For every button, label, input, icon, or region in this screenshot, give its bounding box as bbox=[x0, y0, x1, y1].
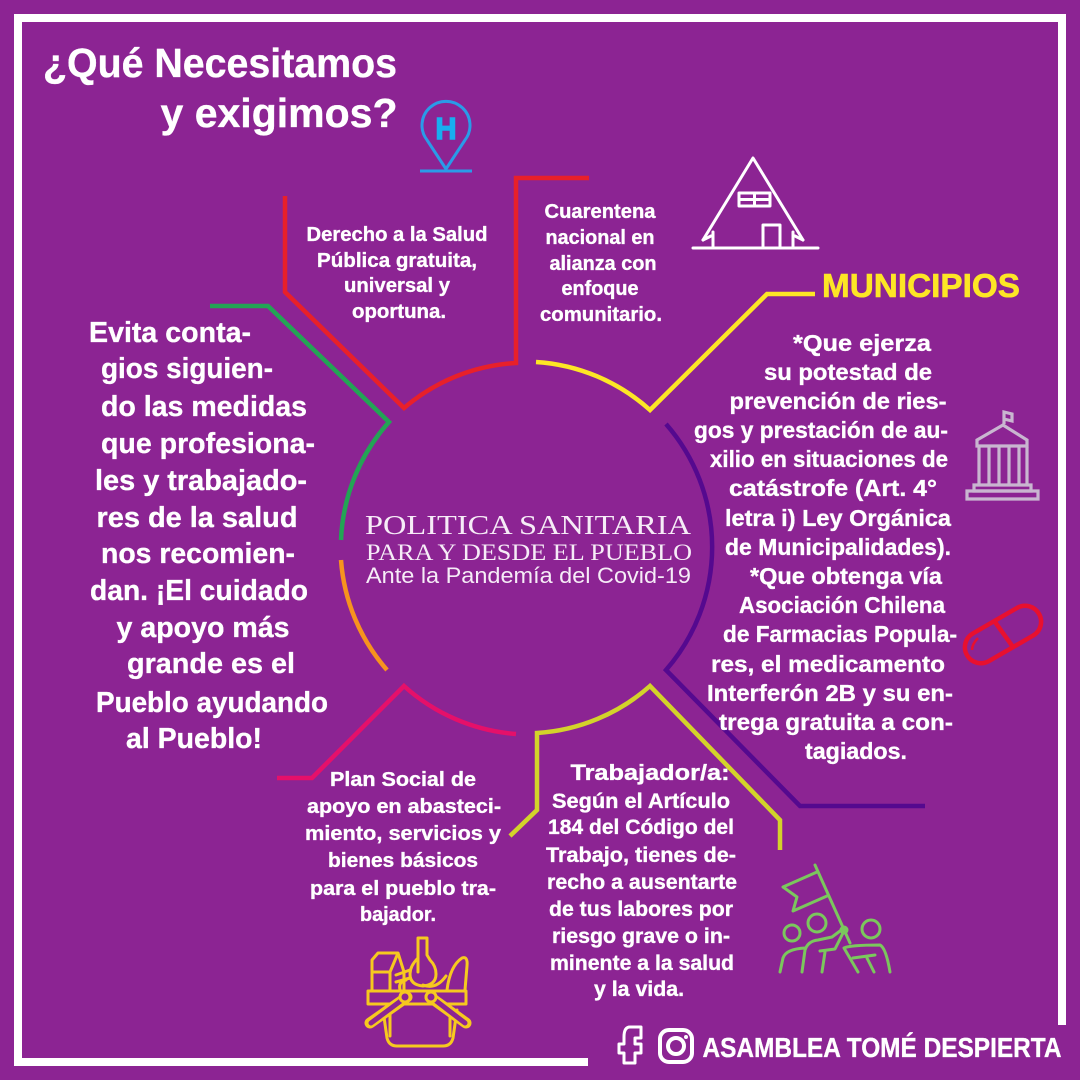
text: derecho a la salud bbox=[306, 224, 488, 323]
text: trabajador/a: y la vida. bbox=[594, 978, 684, 1001]
text: trabajador/a: riesgo grave o in- bbox=[552, 925, 730, 948]
title bbox=[43, 40, 398, 136]
text: municipios demands bbox=[694, 330, 957, 764]
text: evita contagios: que profesiona- bbox=[101, 428, 315, 460]
text: evita contagios: les y trabajado- bbox=[95, 465, 307, 497]
text: municipios demands: catástrofe (Art. 4° bbox=[729, 475, 937, 501]
box bbox=[372, 953, 404, 990]
text: municipios demands: xilio en situaciones de bbox=[710, 446, 948, 472]
belt bbox=[368, 991, 466, 1004]
text: cuarentena bbox=[540, 201, 662, 326]
text: trabajador/a: Trabajo, tienes de- bbox=[546, 844, 736, 867]
text: municipios demands: trega gratuita a con- bbox=[719, 709, 953, 735]
central title bbox=[365, 510, 692, 588]
text: plan social: para el pueblo tra- bbox=[310, 878, 496, 900]
text: municipios demands: letra i) Ley Orgánica bbox=[725, 505, 951, 531]
text: plan social: bajador. bbox=[360, 904, 436, 926]
text: evita contagios: dan. ¡El cuidado bbox=[90, 575, 308, 607]
fruit and bread bbox=[396, 970, 410, 990]
social footer bbox=[619, 1027, 1062, 1063]
green connector bbox=[210, 306, 389, 540]
text: cuarentena: comunitario. bbox=[540, 304, 662, 326]
text: derecho a la salud: Derecho a la Salud bbox=[306, 224, 488, 246]
text: evita contagios: res de la salud bbox=[96, 502, 298, 534]
bottle bbox=[410, 938, 436, 986]
text: trabajador/a: Según el Artículo bbox=[552, 790, 730, 813]
text: trabajador/a: recho a ausentarte bbox=[547, 871, 737, 894]
text: derecho a la salud: oportuna. bbox=[352, 301, 446, 323]
title: y exigimos? bbox=[160, 90, 398, 136]
text: plan social: Plan Social de bbox=[330, 769, 476, 791]
text: plan social: miento, servicios y bbox=[305, 823, 502, 845]
central title: POLITICA SANITARIA bbox=[365, 510, 692, 540]
text: plan social bbox=[305, 769, 502, 926]
text: municipios demands: *Que obtenga vía bbox=[750, 563, 942, 589]
yellow connector bbox=[536, 294, 815, 410]
text: trabajador/a bbox=[546, 760, 737, 1001]
text: evita contagios: al Pueblo! bbox=[126, 723, 262, 755]
heading: municipios: MUNICIPIOS bbox=[822, 267, 1020, 304]
icon: house bbox=[693, 158, 818, 248]
text: municipios demands: *Que ejerza bbox=[793, 330, 931, 356]
dark violet connector bbox=[666, 424, 925, 806]
text: plan social: bienes básicos bbox=[328, 850, 478, 872]
text: plan social: apoyo en abasteci- bbox=[307, 796, 501, 818]
text: evita contagios: Evita conta- bbox=[89, 317, 251, 349]
icon: hospital pin: H bbox=[436, 111, 456, 146]
text: municipios demands: Asociación Chilena bbox=[739, 592, 945, 618]
text: municipios demands: su potestad de bbox=[764, 359, 932, 385]
text: municipios demands: prevención de ries- bbox=[730, 388, 946, 414]
text: municipios demands: de Farmacias Popula- bbox=[723, 621, 957, 647]
magenta connector bbox=[277, 686, 516, 778]
text: municipios demands: Interferón 2B y su en- bbox=[707, 680, 953, 706]
red connector bbox=[285, 178, 589, 408]
text: evita contagios: grande es el bbox=[127, 648, 295, 680]
text: municipios demands: gos y prestación de au- bbox=[694, 417, 948, 443]
text: cuarentena: alianza con bbox=[550, 253, 656, 275]
icon: food basket bbox=[368, 938, 467, 1046]
orange arc bbox=[341, 560, 387, 670]
text: municipios demands: res, el medicamento bbox=[711, 651, 945, 677]
text: trabajador/a: minente a la salud bbox=[550, 952, 734, 975]
icon: facebook bbox=[619, 1027, 641, 1063]
text: cuarentena: nacional en bbox=[546, 227, 654, 249]
text: trabajador/a: 184 del Código del bbox=[548, 816, 734, 839]
icon: instagram bbox=[660, 1030, 692, 1062]
text: municipios demands: tagiados. bbox=[805, 738, 907, 764]
text: cuarentena: Cuarentena bbox=[544, 201, 656, 223]
icon: hospital pin bbox=[420, 101, 472, 171]
text: trabajador/a: de tus labores por bbox=[549, 898, 733, 921]
icon: people with flag bbox=[780, 865, 890, 972]
text: evita contagios: nos recomien- bbox=[101, 538, 295, 570]
diagram ring and connector lines bbox=[210, 178, 925, 850]
basket body bbox=[383, 1010, 457, 1046]
central title: Ante la Pandemía del Covid-19 bbox=[366, 563, 691, 588]
icon: municipal building bbox=[967, 412, 1038, 499]
text: cuarentena: enfoque bbox=[562, 278, 638, 300]
text: derecho a la salud: Pública gratuita, bbox=[317, 250, 477, 272]
text: derecho a la salud: universal y bbox=[344, 275, 451, 297]
handles bbox=[370, 997, 466, 1023]
text: evita contagios: gios siguien- bbox=[101, 353, 273, 385]
title: ¿Qué Necesitamos bbox=[43, 40, 397, 86]
text: evita contagios: y apoyo más bbox=[116, 612, 290, 644]
icon: pill capsule bbox=[959, 600, 1047, 669]
central title: PARA Y DESDE EL PUEBLO bbox=[366, 540, 692, 565]
text: municipios demands: de Municipalidades). bbox=[725, 534, 951, 560]
text: evita contagios: Pueblo ayudando bbox=[96, 687, 328, 719]
text: evita contagios bbox=[89, 317, 328, 755]
text: trabajador/a: Trabajador/a: bbox=[570, 760, 730, 785]
text: evita contagios: do las medidas bbox=[101, 391, 307, 423]
olive connector bbox=[510, 686, 780, 850]
